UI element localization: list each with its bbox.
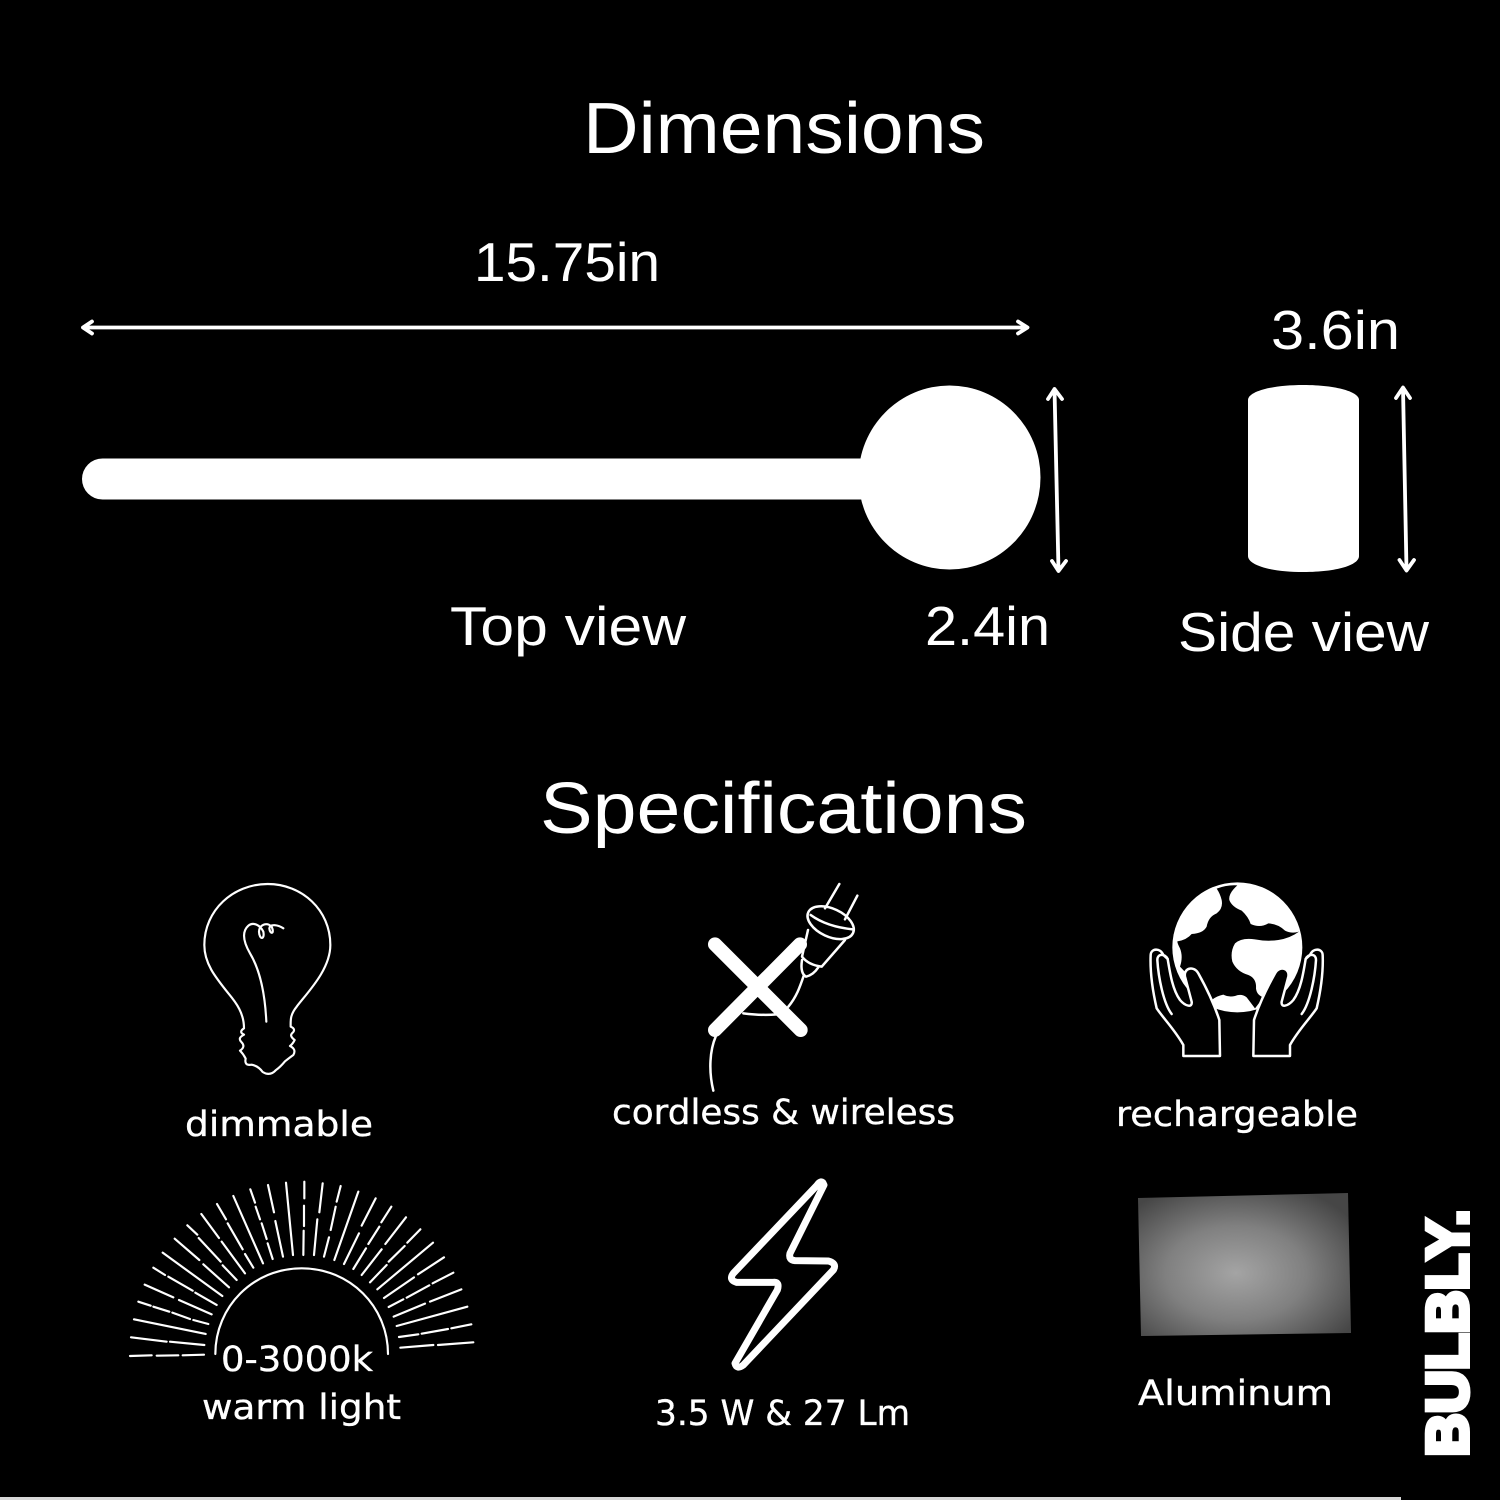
arrow: side height: [1396, 388, 1414, 570]
icon: sunburst warm light: [130, 1182, 473, 1356]
brand logo: BULBLY.: BULBLY.: [1416, 1210, 1480, 1456]
label: rechargeable: rechargeable: [1116, 1095, 1358, 1135]
swatch: aluminum texture: [1138, 1193, 1351, 1336]
icon: crossed-out plug: [710, 884, 859, 1091]
heading: Dimensions: Dimensions: [583, 89, 985, 169]
label: dimmable: dimmable: [185, 1105, 373, 1145]
arrow: head diameter: [1048, 389, 1066, 571]
label: 0-3000k warm light: 0-3000k: [221, 1340, 374, 1380]
label: 0-3000k warm light: [202, 1340, 401, 1428]
label: 3.5 W & 27 Lm: 3.5 W & 27 Lm: [655, 1394, 910, 1434]
top view silhouette: [82, 386, 1040, 570]
label: 0-3000k warm light: warm light: [202, 1388, 401, 1428]
side view silhouette: [1248, 385, 1359, 572]
heading: Specifications: Specifications: [540, 769, 1027, 849]
label: cordless & wireless: cordless & wireless: [612, 1093, 955, 1133]
label: Aluminum: Aluminum: [1138, 1374, 1333, 1414]
icon: light bulb: [204, 884, 330, 1074]
label: head diameter 2.4in: 2.4in: [925, 595, 1050, 657]
label: total length 15.75in: 15.75in: [474, 231, 660, 293]
icon: lightning bolt: [731, 1182, 835, 1367]
arrow: horizontal length: [83, 322, 1028, 334]
label: height 3.6in: 3.6in: [1271, 299, 1400, 361]
panel: specifications: [130, 769, 1358, 1434]
icon: globe held in hands: [1151, 882, 1323, 1056]
label: Side view: Side view: [1178, 601, 1429, 663]
panel: dimensions: [82, 89, 1429, 663]
label: Top view: Top view: [450, 595, 686, 657]
